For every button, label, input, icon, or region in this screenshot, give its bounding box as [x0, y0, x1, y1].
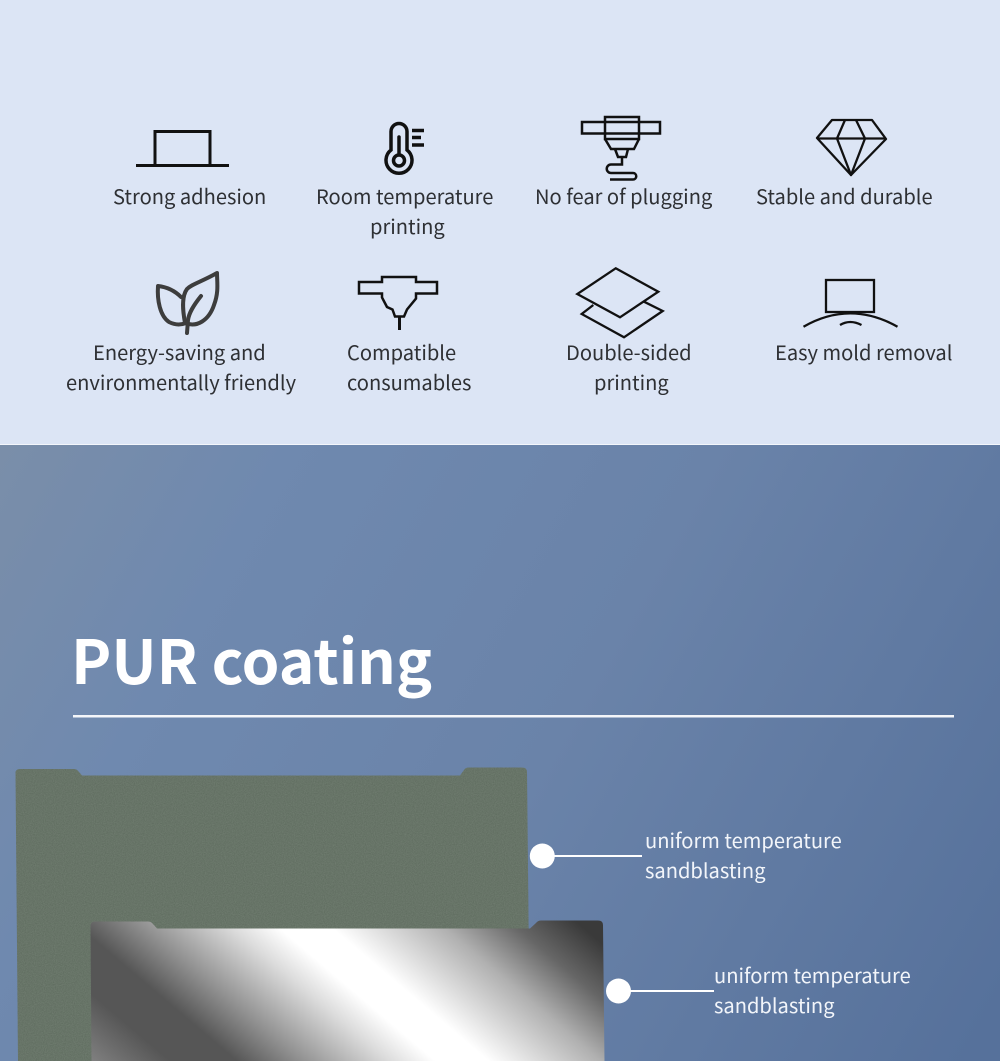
- label: double-sided printing: Double-sided: [566, 337, 692, 366]
- icon: layers: [577, 268, 663, 337]
- feature: compatible consumables: [347, 277, 471, 396]
- feature: stable and durable: [756, 120, 933, 210]
- label: strong adhesion: Strong adhesion: [113, 181, 266, 210]
- feature: no fear of plugging: [535, 117, 713, 210]
- label: stable and durable: Stable and durable: [756, 181, 933, 210]
- callout text: sandblasting: [645, 855, 766, 884]
- label: double-sided printing: [566, 337, 692, 396]
- panel: features background: [0, 0, 1000, 445]
- label: room temperature printing: Room temperature: [316, 181, 493, 210]
- label: energy-saving: Energy-saving and: [93, 337, 266, 366]
- icon: flexed plate: [804, 280, 898, 327]
- leader line: [552, 855, 642, 857]
- feature: strong adhesion: [113, 132, 266, 210]
- icon: block on surface: [136, 132, 229, 166]
- callout text: sandblasting: [714, 990, 835, 1019]
- callout: upper sheet: [530, 825, 842, 884]
- callout text: uniform temperature: [645, 825, 842, 854]
- feature: room temperature printing: [316, 124, 493, 240]
- label: energy-saving: environmentally friendly: [66, 367, 297, 396]
- title: PUR coating: [71, 615, 432, 702]
- label: compatible consumables: consumables: [347, 367, 471, 396]
- label: compatible consumables: Compatible: [347, 337, 456, 366]
- label: no fear of plugging: No fear of plugging: [535, 181, 713, 210]
- panel: PUR coating background: [0, 445, 1000, 1061]
- marker dot: [606, 978, 631, 1004]
- label: room temperature printing: printing: [370, 211, 445, 240]
- icon: print head: [582, 117, 660, 180]
- callout text: [714, 960, 911, 1019]
- leader line: [628, 990, 714, 992]
- callout: lower sheet: [606, 960, 911, 1019]
- feature: easy mold removal: [775, 280, 952, 366]
- icon: diamond: [817, 120, 886, 175]
- marker dot: [530, 844, 555, 868]
- label: room temperature printing: [316, 181, 493, 240]
- icon: thermometer: [386, 124, 424, 173]
- title divider: [73, 715, 954, 718]
- label: compatible consumables: [347, 337, 471, 396]
- callout text: [645, 825, 842, 884]
- feature: energy-saving: [66, 273, 297, 396]
- smooth metal sheet: [90, 920, 604, 1061]
- label: energy-saving: [66, 337, 297, 396]
- icon: leaf: [158, 273, 217, 333]
- label: easy mold removal: Easy mold removal: [775, 337, 952, 366]
- icon: nozzle: [359, 277, 437, 330]
- textured PUR sheet: [16, 768, 530, 1061]
- callout text: uniform temperature: [714, 960, 911, 989]
- label: double-sided printing: printing: [594, 367, 669, 396]
- feature: double-sided printing: [566, 268, 692, 396]
